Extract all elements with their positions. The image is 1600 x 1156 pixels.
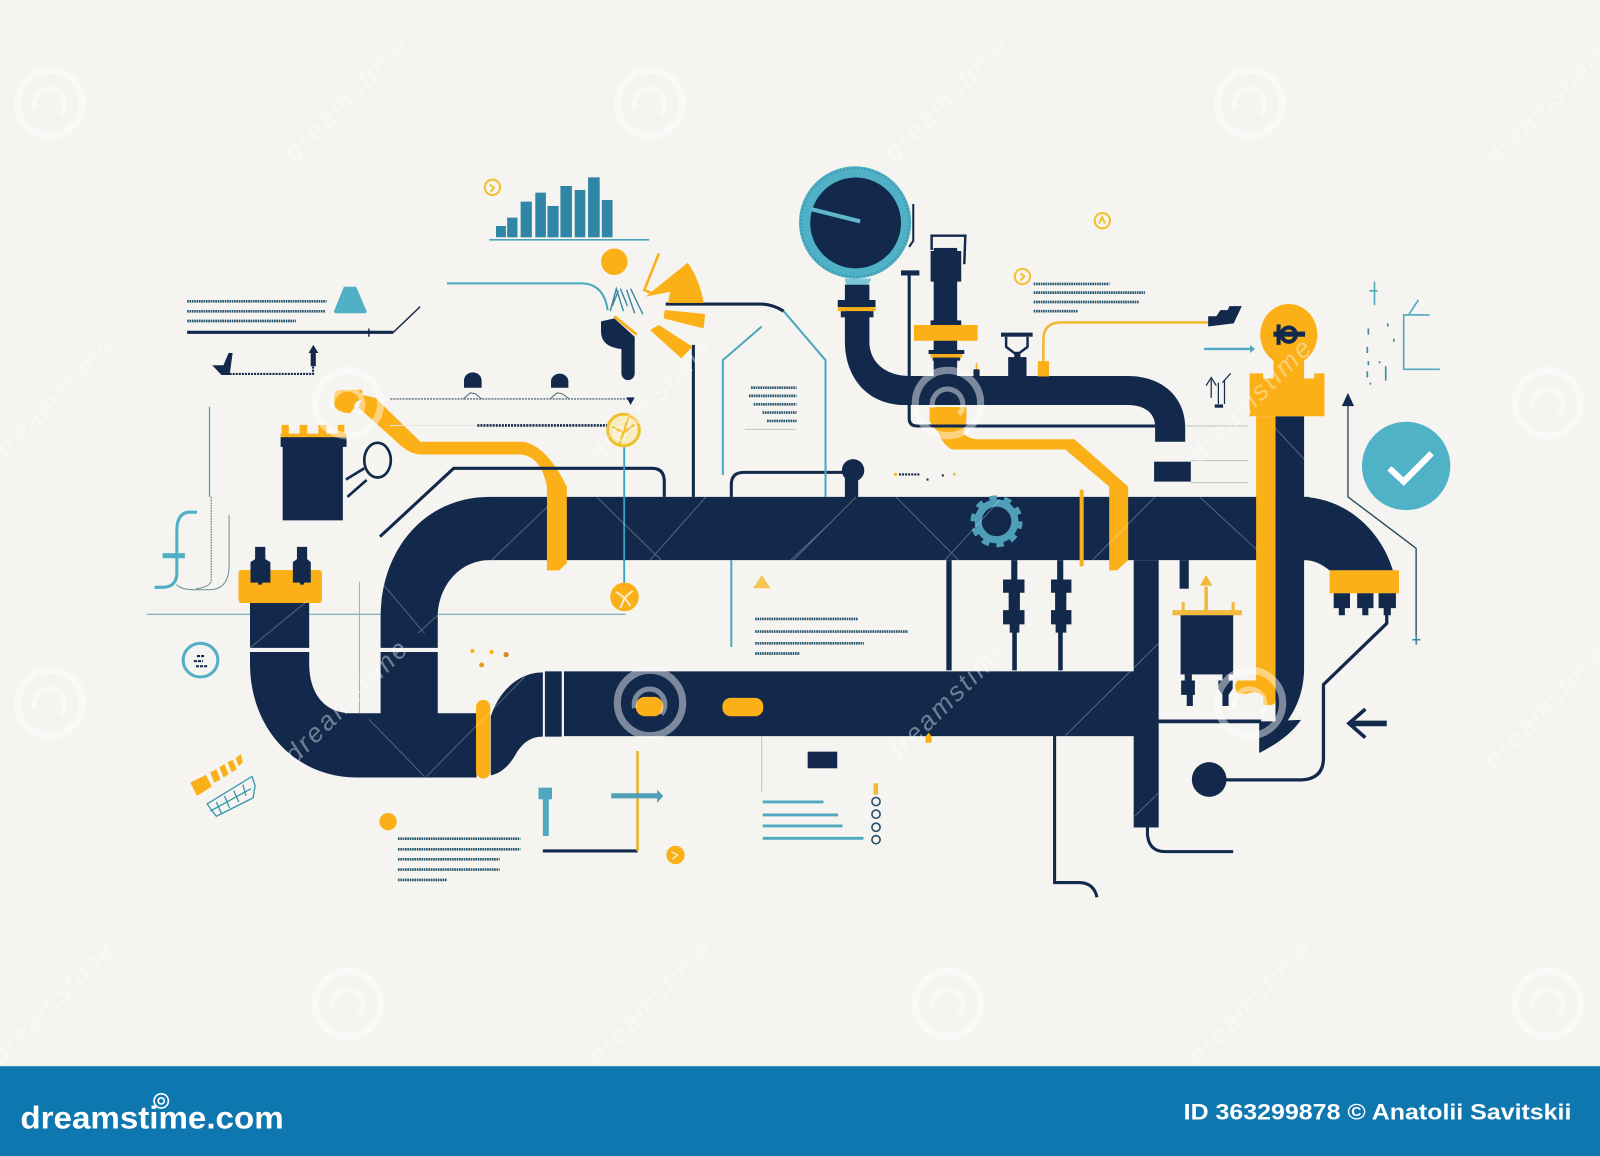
upper left text block <box>187 287 420 337</box>
check badge <box>1362 422 1450 510</box>
yellow line to ship icon <box>1038 306 1242 376</box>
watermark text: dreamstime <box>582 935 717 1070</box>
lower center list <box>762 737 880 844</box>
watermark text: dreamstime <box>878 634 1013 769</box>
navy routing lines over main pipe <box>380 345 864 537</box>
collar feet <box>1334 593 1396 615</box>
second riser pipe with flange <box>914 236 978 376</box>
yellow pill two <box>722 698 763 716</box>
under-pipe connectors <box>946 560 1071 670</box>
yellow pill one <box>636 697 663 716</box>
right up arrow line <box>1342 393 1420 645</box>
yellow vertical pipe with hook <box>1235 416 1276 705</box>
lower navy hooks <box>1055 736 1233 897</box>
pentagon tag lines <box>666 304 826 497</box>
T-handle with routing line <box>901 270 1155 426</box>
watermark text: dreamstime <box>1182 333 1317 468</box>
lower pipe short segment <box>545 671 562 737</box>
right elbow <box>1304 497 1393 570</box>
yellow valve ring <box>1260 304 1317 365</box>
thin crosshair lines <box>147 582 626 713</box>
left squiggle formula <box>155 407 229 590</box>
lower left yellow dot <box>379 813 397 830</box>
watermark text: dreamstime <box>278 32 413 167</box>
tank with crown <box>281 425 347 520</box>
lower U bend <box>250 652 477 777</box>
yellow stripe on main pipe <box>1080 490 1084 566</box>
upper main pipe with left elbow <box>381 497 1309 648</box>
watermark text: dreamstime <box>278 634 413 769</box>
lower pipe elbow <box>491 672 543 775</box>
teal arrow right <box>1204 345 1255 353</box>
vertical drop bar <box>1134 560 1159 827</box>
valve icon <box>1273 324 1305 345</box>
watermark diagonal hairlines <box>250 429 1304 816</box>
small yellow coin icons <box>485 180 1110 284</box>
side navy block with thin lines <box>1154 426 1248 483</box>
left yellow pipe cap <box>334 390 362 413</box>
lower navy tag <box>808 752 837 768</box>
image credit: ID 363299878 © Anatolii Savitskii <box>1184 1099 1571 1124</box>
logo spiral <box>154 1094 168 1108</box>
dotted flow arrow <box>212 345 318 375</box>
orange dots <box>470 649 509 667</box>
gauge pipe collar <box>838 300 876 317</box>
upper gauge pipe <box>845 285 1185 442</box>
right yellow collar <box>1330 570 1399 593</box>
watermark text: dreamstime <box>1182 935 1317 1070</box>
logo text: dreamstime.com <box>20 1099 284 1135</box>
upper right teal marks <box>1367 282 1440 385</box>
left arrow <box>1349 709 1387 738</box>
left yellow branch pipe <box>359 395 567 570</box>
pressure gauge <box>799 166 913 285</box>
lower left text block <box>398 839 520 880</box>
lamp blob with feather <box>447 283 643 380</box>
footer banner <box>0 1066 1600 1156</box>
teal T marker and arrow <box>538 751 663 851</box>
yellow sun and fan <box>601 248 705 358</box>
right vertical pipe with arrow end <box>1259 416 1304 753</box>
center text block with triangle <box>731 560 908 654</box>
gear icon <box>975 500 1018 543</box>
lower horizontal pipe <box>564 671 1135 736</box>
pentagon text block <box>745 388 797 429</box>
node circle with route line <box>1192 612 1387 797</box>
lower yellow coin <box>666 846 685 864</box>
dotted line with bell markers <box>390 372 635 425</box>
left yellow flange with plugs <box>238 547 322 603</box>
yellow wheel connector <box>608 414 639 611</box>
small dotted label <box>894 473 956 481</box>
upper right text block <box>1034 284 1145 311</box>
bar chart <box>489 177 649 240</box>
right yellow branch pipe <box>930 407 1128 570</box>
right equipment box <box>1158 560 1261 721</box>
small yellow nub <box>926 733 932 743</box>
left leg top section <box>250 603 309 648</box>
yellow coupling on U bend <box>476 700 490 778</box>
main pipe network <box>250 285 1399 827</box>
small valve <box>973 333 1033 376</box>
watermark text: dreamstime <box>878 32 1013 167</box>
teal triangle <box>334 287 367 313</box>
magnifier ring <box>346 443 391 497</box>
small up arrow outline <box>1206 373 1231 407</box>
yellow tags and teal wireframe <box>190 754 255 816</box>
watermark text: dreamstime <box>582 333 717 468</box>
yellow flange below gauge pipe <box>930 407 966 421</box>
yellow collar <box>1250 357 1324 416</box>
left clock icon <box>183 643 218 677</box>
